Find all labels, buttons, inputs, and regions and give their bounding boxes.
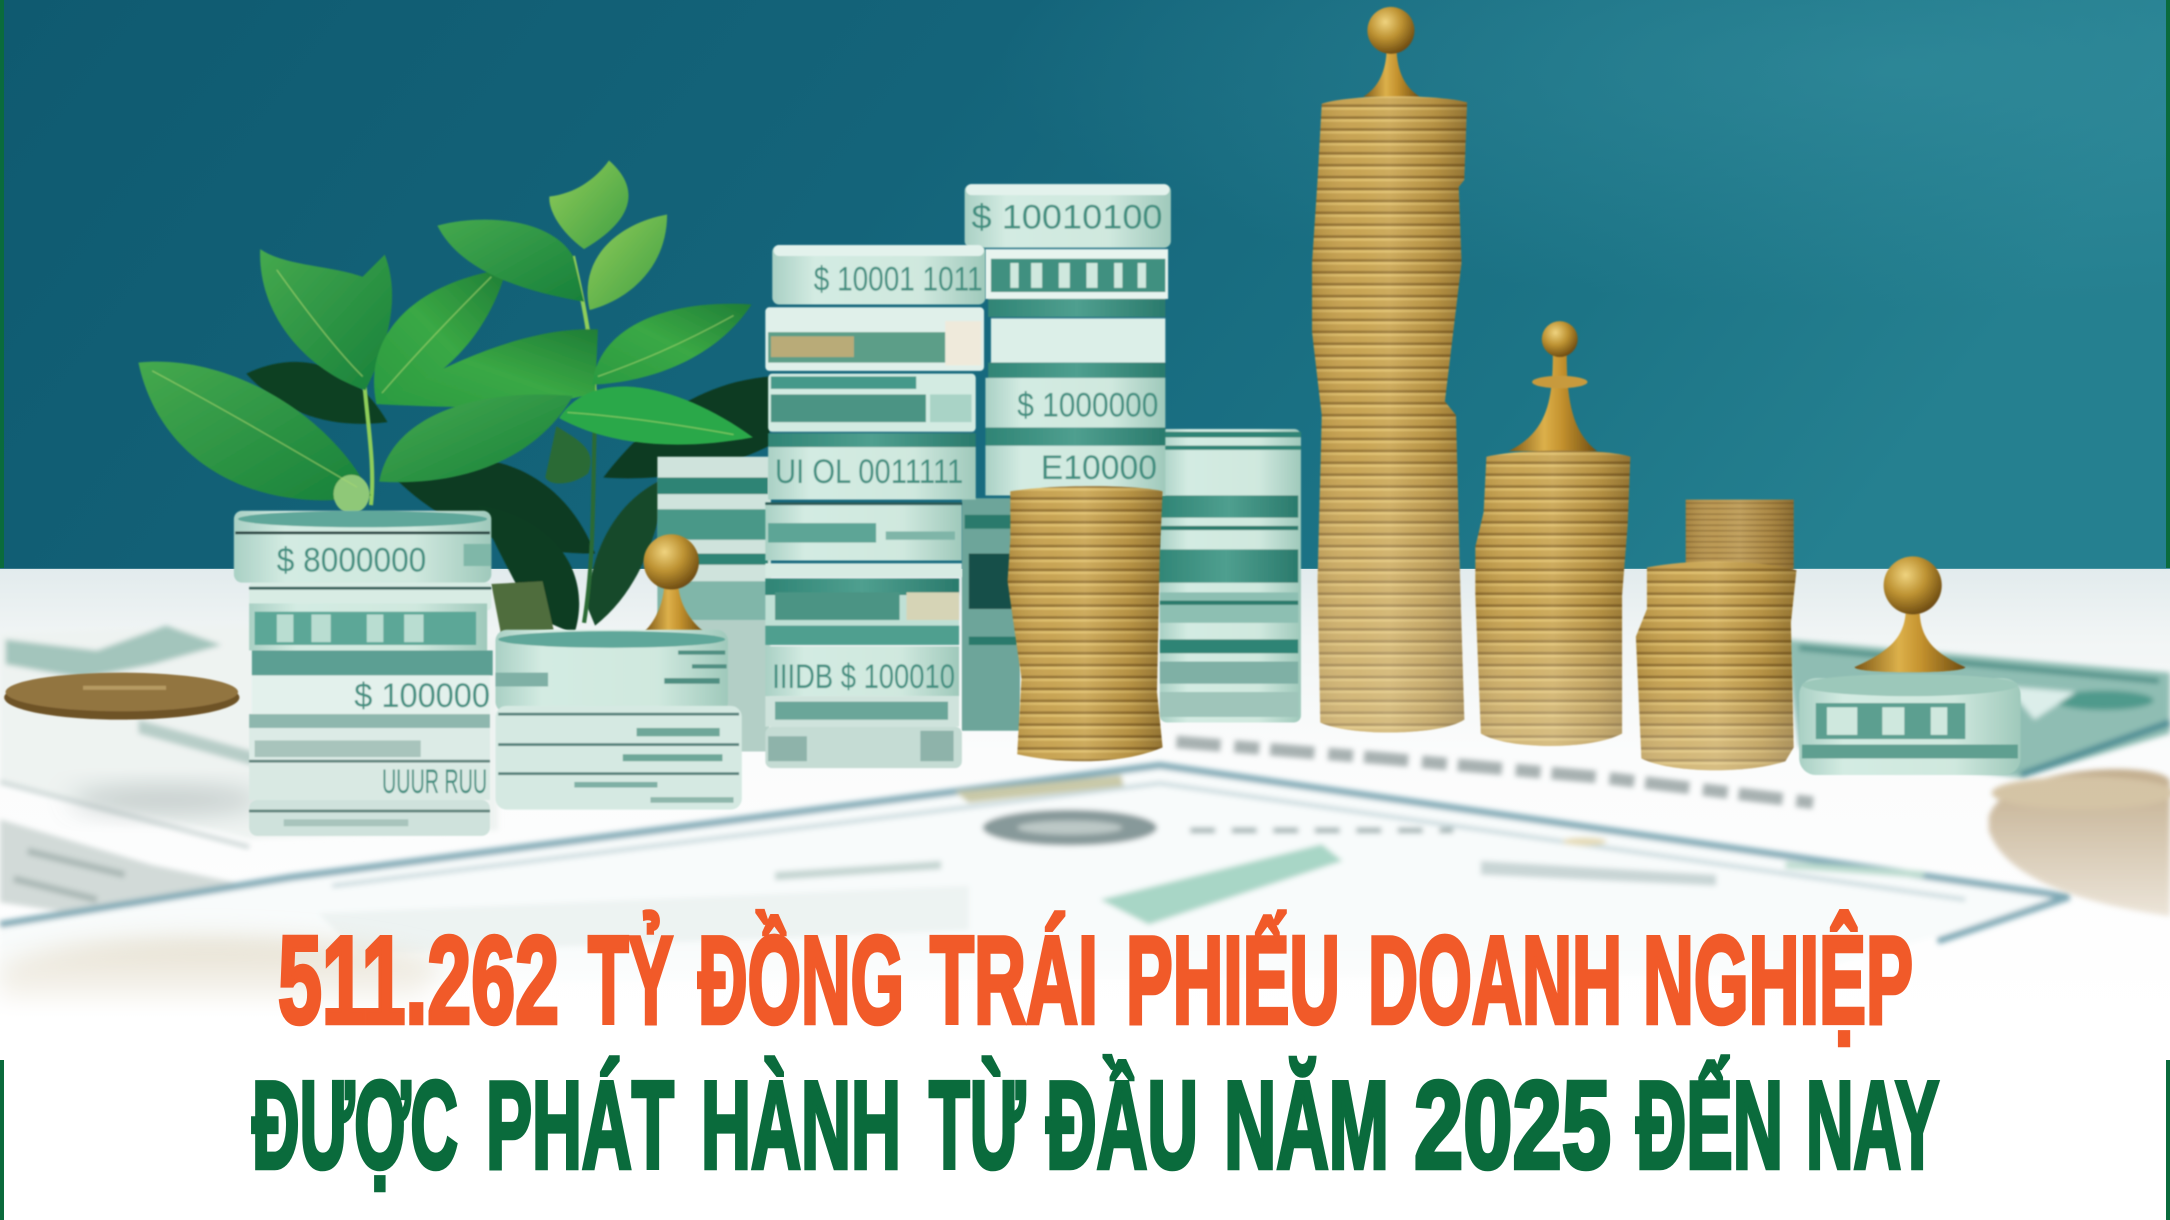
title line 2: TỪ xyxy=(929,1057,1025,1195)
white fade at bottom of photo xyxy=(0,941,2170,1019)
bill lettering: $ 8000000 xyxy=(277,542,426,580)
title line 1: 511.262 xyxy=(278,912,559,1050)
title line 2: NAY xyxy=(1806,1057,1939,1195)
plant: dark back foliage xyxy=(246,362,770,634)
green certificate ribbon xyxy=(1100,844,1342,925)
big left leaf xyxy=(138,362,371,500)
back note stack behind plant xyxy=(657,457,771,752)
right edge accent bars xyxy=(2166,0,2170,1220)
bill lettering: IIIDB $ 100010 xyxy=(772,658,955,696)
blurred beige coin bottom left xyxy=(0,938,443,1010)
title line 1: ĐỒNG xyxy=(698,911,904,1050)
leaf lower middle xyxy=(379,394,573,482)
title line 1: PHIẾU xyxy=(1126,911,1340,1050)
left banknote xyxy=(0,626,498,925)
title line 1 xyxy=(278,911,1913,1050)
bill lettering: E10000 xyxy=(1041,449,1157,487)
bill lettering: UI OL 0011111 xyxy=(775,453,963,491)
large foreground bond certificate xyxy=(0,765,2069,985)
leaf upper center xyxy=(374,268,507,404)
title line 1: TRÁI xyxy=(930,912,1098,1050)
pawn small behind stack 2 xyxy=(644,534,703,631)
blurred lettering on paper xyxy=(1176,742,1813,803)
bill lettering: $ 10010100 xyxy=(972,198,1163,236)
plant stems xyxy=(363,256,595,505)
title line 2 xyxy=(252,1056,1939,1195)
bill lettering: $ 10001 1011 xyxy=(814,261,983,299)
bill lettering: UUUR RUU xyxy=(382,763,487,801)
right banknote xyxy=(1785,639,2170,778)
title line 2: ĐẦU xyxy=(1046,1056,1198,1195)
note stack 1 left xyxy=(234,511,493,836)
bronze coin lying on the table xyxy=(4,673,239,720)
note stack 3 center xyxy=(765,245,985,768)
top sprout leaf xyxy=(549,161,629,249)
title line 2: PHÁT xyxy=(486,1057,674,1195)
title line 1: TỶ xyxy=(588,911,673,1050)
bill lettering: $ 1000000 xyxy=(1017,387,1158,425)
white table surface xyxy=(0,569,2170,1026)
tall gold stack with finial xyxy=(1312,7,1467,733)
teal wall background xyxy=(0,0,2170,570)
plant: bright leaves xyxy=(138,161,753,513)
medium gold stack with pawn xyxy=(1475,321,1630,746)
small right note stack with pawn xyxy=(1799,556,2021,775)
small bud xyxy=(334,475,370,513)
leaf middle long xyxy=(376,329,598,407)
title line 2: ĐẾN xyxy=(1636,1056,1783,1195)
leaf upper second xyxy=(437,220,584,302)
paper banknotes on the table xyxy=(0,626,2170,985)
note stack 5 back right xyxy=(1154,429,1301,722)
short gold stack xyxy=(1636,500,1796,770)
leaf lower right bright xyxy=(559,387,753,445)
leaf upper third xyxy=(588,215,667,310)
certificate seal xyxy=(983,810,1157,846)
note stack 4 tall xyxy=(962,184,1171,731)
white panel under photo xyxy=(0,1018,2170,1220)
blurred foreground coin right xyxy=(1989,769,2170,916)
title line 2: NĂM xyxy=(1224,1057,1389,1195)
leaf veins xyxy=(152,270,734,487)
left edge accent bars xyxy=(0,0,4,1220)
title line 2: 2025 xyxy=(1414,1057,1611,1195)
title line 1: NGHIỆP xyxy=(1643,911,1913,1050)
title line 2: ĐƯỢC xyxy=(252,1057,458,1195)
gold stack A xyxy=(1008,486,1163,761)
bill lettering: $ 100000 xyxy=(354,677,490,715)
leaf right xyxy=(592,304,752,385)
title line 2: HÀNH xyxy=(701,1057,901,1195)
note stack 2 small xyxy=(495,630,742,810)
soft stack shadow xyxy=(69,786,263,814)
title line 1: DOANH xyxy=(1368,912,1622,1050)
leaf upper left xyxy=(260,249,392,390)
